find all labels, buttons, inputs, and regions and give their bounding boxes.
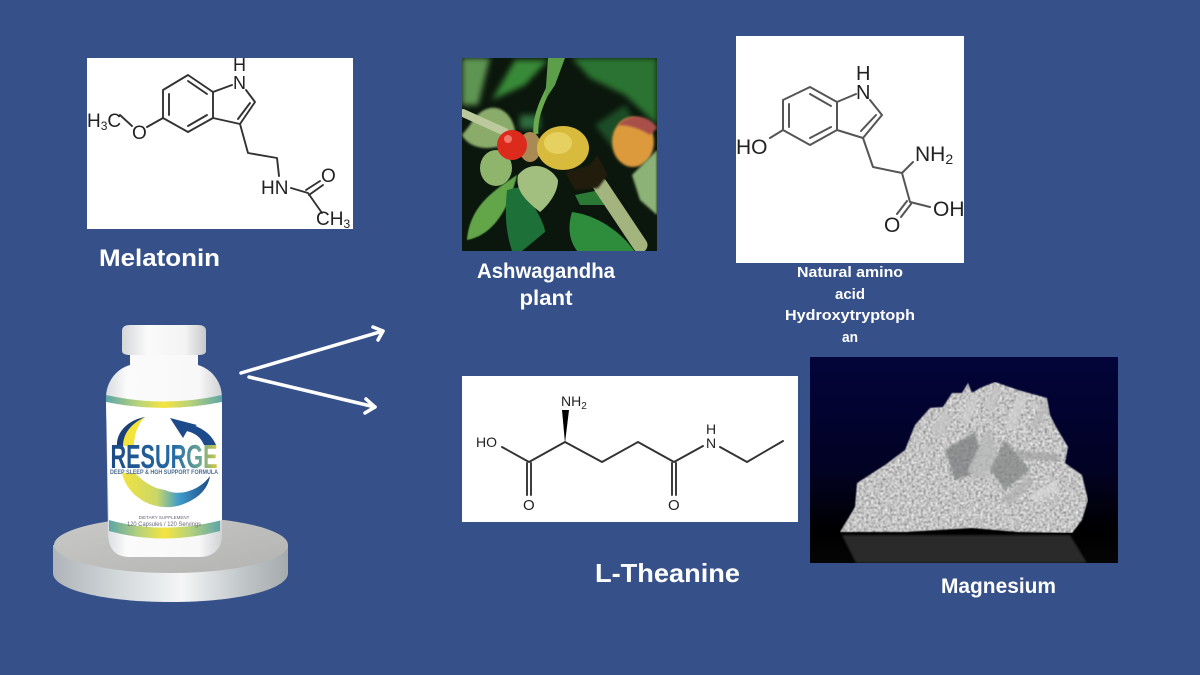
crystal shards (930, 384, 1060, 505)
dark leaf (506, 187, 545, 251)
panel: melatonin structure (87, 55, 353, 231)
mid leaf (575, 191, 604, 205)
label: natural amino acid hydroxytryptophan: acid (835, 286, 865, 303)
panel: melatonin structure: O (321, 166, 336, 187)
arrow: to lower ingredients (249, 377, 375, 413)
panel: hydroxytryptophan structure: O (884, 214, 900, 237)
label face (106, 402, 222, 528)
right pod (632, 150, 657, 215)
panel: hydroxytryptophan structure: NH (915, 143, 945, 166)
panel: melatonin structure: C (107, 111, 121, 132)
label: L-theanine: L-Theanine (595, 558, 740, 588)
panel: melatonin structure: CH (316, 209, 343, 230)
panel: melatonin structure: N (233, 73, 246, 93)
label: natural amino acid hydroxytryptophan: an (842, 329, 858, 346)
left pods (462, 108, 515, 148)
panel: melatonin structure: H (87, 111, 101, 132)
label: natural amino acid hydroxytryptophan (785, 264, 915, 346)
label: magnesium: Magnesium (941, 575, 1056, 598)
panel: melatonin structure: H (233, 55, 246, 75)
panel: hydroxytryptophan structure (736, 36, 964, 263)
logo: DEEP SLEEP & HGH SUPPORT FORMULA (110, 469, 218, 476)
red berry (497, 130, 527, 160)
panel: hydroxytryptophan structure: N (856, 82, 870, 104)
label: ashwagandha plant: plant (520, 287, 572, 310)
arrow: to upper ingredients (241, 327, 383, 373)
panel: magnesium photo (810, 357, 1118, 563)
label stripes (106, 395, 222, 408)
orange fruit (612, 117, 654, 167)
panel: L-theanine structure: N (706, 435, 716, 451)
panel: melatonin structure: HN (261, 178, 288, 199)
yellow fruit (537, 126, 589, 170)
calyx (522, 132, 540, 162)
left leaf (467, 175, 517, 240)
product bottle: DIETARY SUPPLEMENT (139, 515, 190, 520)
bottle body (106, 355, 222, 557)
main stem (600, 185, 640, 245)
crystal mass (840, 382, 1088, 533)
label: ashwagandha plant: Ashwagandha (477, 260, 615, 283)
logo: RESURGE (110, 438, 218, 475)
product bottle: 120 Capsules / 120 Servings (127, 522, 201, 528)
panel: hydroxytryptophan structure: H (856, 63, 870, 85)
platform (53, 517, 288, 602)
panel: hydroxytryptophan structure: HO (736, 136, 768, 159)
panel: melatonin structure: 3 (101, 119, 108, 133)
panel: L-theanine structure: 2 (581, 401, 587, 412)
panel: L-theanine structure: HO (476, 434, 497, 450)
reflection (842, 535, 1087, 563)
label: natural amino acid hydroxytryptophan: Hydroxytryptoph (785, 307, 915, 324)
thin stem (536, 72, 557, 134)
panel: L-theanine structure (462, 376, 798, 522)
lower right leaf (570, 212, 635, 252)
panel: melatonin structure: O (132, 123, 147, 144)
panel: hydroxytryptophan structure: OH (933, 198, 964, 221)
label: melatonin: Melatonin (99, 245, 220, 272)
lower pod (517, 166, 558, 212)
product bottle (106, 325, 222, 557)
label: ashwagandha plant (477, 260, 615, 310)
panel: melatonin structure: 3 (343, 217, 350, 231)
left pod (480, 150, 512, 186)
panel: L-theanine structure: O (668, 497, 680, 514)
panel: L-theanine structure: H (706, 421, 716, 437)
panel: ashwagandha plant photo (462, 58, 657, 252)
label: natural amino acid hydroxytryptophan: Natural amino (797, 264, 903, 281)
panel: L-theanine structure: O (523, 497, 535, 514)
panel: L-theanine structure: NH (561, 393, 581, 409)
panel: hydroxytryptophan structure: 2 (945, 151, 953, 167)
logo (110, 417, 218, 507)
bottle cap (122, 325, 206, 355)
